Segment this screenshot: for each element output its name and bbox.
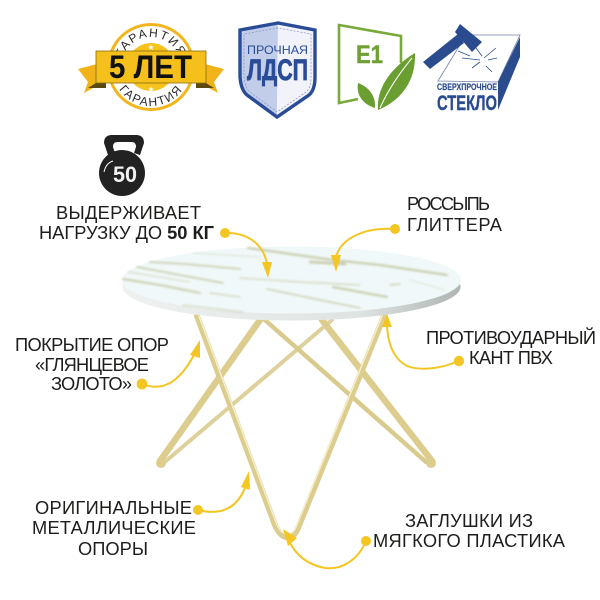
badge: 5 year warranty: 5 ЛЕТ — [109, 49, 192, 85]
badge: 5 year warranty: ГАРАНТИЯ — [116, 28, 186, 51]
label: gold coating — [15, 334, 169, 394]
label: PVC edge — [426, 327, 596, 368]
badge: strong chipboard shield: ЛДСП — [247, 54, 308, 87]
badge: 5 year warranty — [78, 23, 224, 111]
label: plastic caps: ЗАГЛУШКИ ИЗ — [405, 510, 533, 531]
badge: strong chipboard shield — [240, 23, 315, 117]
label: PVC edge: ПРОТИВОУДАРНЫЙ — [426, 327, 596, 348]
badge: 5 year warranty: ГАРАНТИЯ — [120, 84, 182, 106]
arrow: to plastic caps — [283, 529, 371, 568]
heading: load capacity label — [39, 202, 214, 243]
label: gold coating: ПОКРЫТИЕ ОПОР — [15, 334, 169, 355]
arrow: to PVC edge — [382, 314, 464, 369]
arrow: to metal legs — [193, 471, 250, 515]
label: metal legs: МЕТАЛЛИЧЕСКИЕ — [32, 517, 196, 538]
arrow: to table surface — [220, 228, 272, 278]
label: metal legs: ОРИГИНАЛЬНЫЕ — [35, 497, 192, 518]
badge: extra strong glass: СВЕРХПРОЧНОЕ — [437, 82, 497, 92]
heading: load capacity label: НАГРУЗКУ ДО 50 КГ — [39, 222, 214, 243]
heading: load capacity label: ВЫДЕРЖИВАЕТ — [56, 202, 201, 223]
arrow: to glitter — [331, 224, 400, 272]
label: glitter: РОССЫПЬ — [407, 193, 490, 214]
arrow: to gold coating — [137, 340, 200, 389]
label: plastic caps: МЯГКОГО ПЛАСТИКА — [373, 530, 566, 551]
label: gold coating: «ГЛЯНЦЕВОЕ — [35, 354, 149, 375]
badge: E1 eco class: E1 — [356, 41, 383, 69]
badge: extra strong glass — [423, 24, 520, 115]
badge: E1 eco class — [339, 25, 415, 110]
table top with marble — [122, 246, 461, 320]
badge: extra strong glass: СТЕКЛО — [437, 92, 497, 115]
label: glitter — [407, 193, 503, 235]
label: metal legs — [32, 497, 196, 559]
label: plastic caps — [373, 510, 566, 551]
icon: kettlebell 50 — [99, 135, 145, 196]
badge: strong chipboard shield: ПРОЧНАЯ — [247, 43, 308, 57]
table legs — [156, 316, 436, 537]
badge: 5 year warranty: ★ — [147, 85, 155, 94]
label: metal legs: ОПОРЫ — [78, 538, 148, 559]
label: PVC edge: КАНТ ПВХ — [469, 347, 553, 368]
label: gold coating: ЗОЛОТО» — [51, 373, 132, 394]
icon: kettlebell 50: 50 — [113, 162, 137, 187]
label: glitter: ГЛИТТЕРА — [407, 214, 503, 235]
badge: 5 year warranty: ★ — [147, 43, 155, 52]
